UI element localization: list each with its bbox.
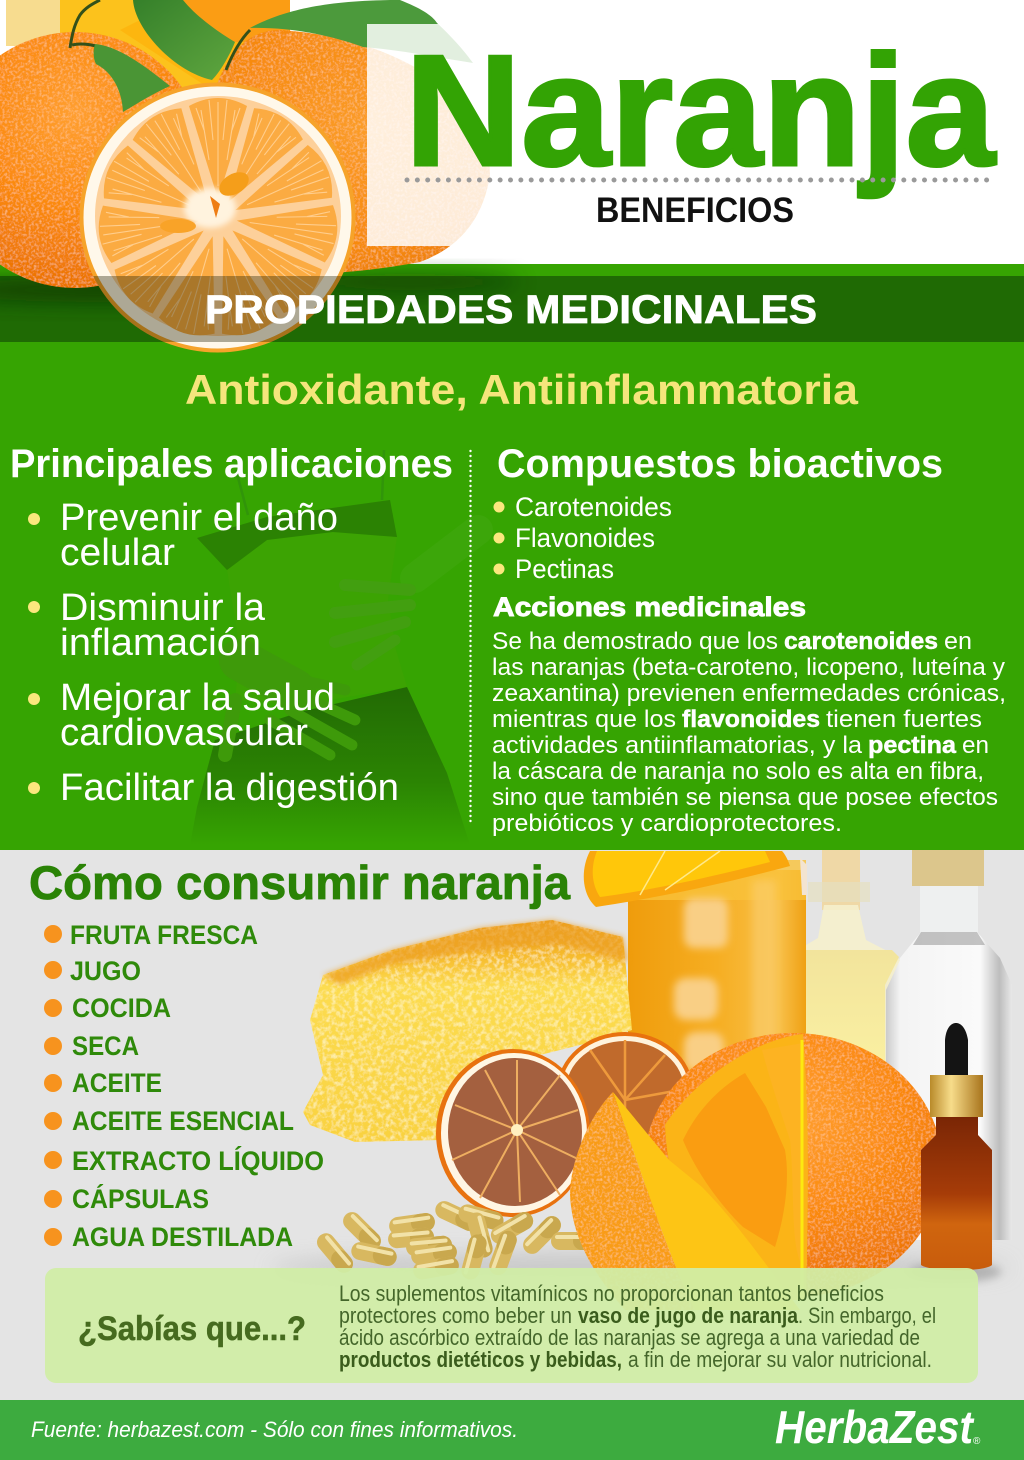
cake: [303, 920, 632, 1142]
logo: HerbaZest: ®: [973, 1436, 981, 1447]
orange slice on glass: [584, 851, 790, 907]
green properties panel background: [0, 264, 1024, 850]
compound list: Pectinas: [515, 554, 614, 584]
paragraph: acciones medicinales: Se ha demostrado que los: [492, 628, 778, 655]
half orange slice: [80, 82, 356, 352]
translucent title panel: [367, 24, 1024, 246]
item: jugo: JUGO: [70, 956, 141, 986]
dark band: Propiedades medicinales: [0, 276, 1024, 342]
item: aceite esencial: ACEITE ESENCIAL: [72, 1106, 294, 1136]
soft shadow under oranges: [0, 273, 520, 302]
leaf: top right: [250, 0, 473, 63]
item: Mejorar la salud cardiovascular: Mejorar la salud: [60, 677, 335, 719]
heading: Compuestos bioactivos: [497, 442, 943, 486]
hand left: [225, 660, 355, 755]
grey consumption panel background: [0, 850, 1024, 1400]
item: agua destilada: AGUA DESTILADA: [72, 1222, 293, 1252]
dotted column divider: [469, 451, 472, 822]
paragraph: acciones medicinales: las naranjas (beta-caroteno, licopeno, luteína y: [492, 654, 1005, 681]
compound list: Carotenoides: [515, 492, 672, 522]
item: Disminuir la inflamación: Disminuir la: [60, 587, 266, 629]
callout box: [45, 1268, 978, 1383]
large cut orange: [570, 1033, 942, 1310]
dried orange slice: front: [436, 1049, 590, 1217]
paragraph: acciones medicinales: en: [962, 732, 989, 759]
paragraph: acciones medicinales: actividades antiinflamatorias, y la: [492, 732, 863, 759]
clear bottle: [885, 850, 1012, 1240]
right orange: [200, 30, 490, 273]
item: seca: SECA: [72, 1031, 139, 1061]
item: cocida: COCIDA: [72, 993, 171, 1023]
product photo group: [270, 850, 1012, 1310]
logo: HerbaZest: HerbaZest: [775, 1401, 974, 1453]
leaf: centre: [133, 0, 235, 80]
paragraph: acciones medicinales: sino que también se piensa que posee efectos: [492, 784, 998, 811]
leaf: left: [94, 44, 170, 112]
compound list: Flavonoides: [515, 523, 655, 553]
subtitle: Beneficios: BENEFICIOS: [596, 191, 794, 230]
item: Prevenir el daño celular: [28, 497, 338, 574]
item: Prevenir el daño celular: celular: [60, 532, 175, 574]
bra: [197, 500, 397, 570]
callout body text: vaso de jugo de naranja: [578, 1303, 799, 1328]
heading: Principales aplicaciones: [10, 442, 453, 486]
item: Mejorar la salud cardiovascular: cardiovascular: [60, 712, 308, 754]
item: fruta fresca: FRUTA FRESCA: [70, 920, 258, 950]
paragraph: acciones medicinales: flavonoides: [682, 706, 820, 733]
callout body text: [339, 1281, 936, 1372]
paragraph: acciones medicinales: carotenoides: [784, 628, 938, 655]
right column: Compuestos bioactivos: [492, 442, 1006, 837]
paragraph: acciones medicinales: mientras que los: [492, 706, 676, 733]
heading: Propiedades medicinales: PROPIEDADES MEDICINALES: [205, 288, 817, 332]
paragraph: acciones medicinales: pectina: [868, 732, 957, 759]
back fruit pieces: [6, 0, 290, 92]
paragraph: acciones medicinales: tienen fuertes: [826, 706, 982, 733]
callout body text: protectores como beber un: [339, 1303, 572, 1328]
callout body text: Los suplementos vitamínicos no proporcionan tantos beneficios: [339, 1281, 884, 1306]
torso: [227, 532, 407, 705]
list: consumption forms: [44, 920, 324, 1252]
item: extracto líquido: EXTRACTO LÍQUIDO: [72, 1145, 324, 1176]
pants: [190, 687, 470, 845]
paragraph: acciones medicinales: en: [944, 628, 972, 655]
background silhouette: torso with hands: [190, 450, 478, 845]
item: Disminuir la inflamación: [28, 587, 266, 664]
subheading: Antioxidante, Antiinflammatoria: Antioxidante, Antiinflammatoria: [185, 366, 859, 413]
item: Facilitar la digestión: Facilitar la digestión: [60, 767, 399, 809]
footer bar: [0, 1400, 1024, 1460]
straps: [236, 450, 384, 515]
item: Disminuir la inflamación: inflamación: [60, 622, 261, 664]
title: Naranja: Naranja: [405, 23, 996, 199]
hero image: oranges with leaves: [0, 0, 520, 352]
soft floor shadows: [284, 1247, 994, 1268]
item: cápsulas: CÁPSULAS: [72, 1183, 209, 1214]
footer source text: Fuente: herbazest.com - Sólo con fines informativos.: [31, 1417, 518, 1442]
item: Prevenir el daño celular: Prevenir el daño: [60, 497, 338, 539]
paragraph: acciones medicinales: zeaxantina) previenen enfermedades crónicas,: [492, 680, 1006, 707]
callout heading: ¿Sabías que...?: [78, 1310, 306, 1348]
compound list: [494, 492, 672, 584]
dried orange slice: back: [557, 1032, 693, 1148]
dimmed slice under band: [93, 276, 342, 342]
dotted divider under title: [407, 178, 990, 182]
heading: Acciones medicinales: Acciones medicinales: [493, 592, 806, 622]
juice glass: [628, 858, 807, 1080]
callout body text: ácido ascórbico extraído de las naranjas se agrega a una variedad de: [339, 1325, 920, 1350]
paragraph: acciones medicinales: prebióticos y cardioprotectores.: [492, 810, 842, 837]
item: Mejorar la salud cardiovascular: [28, 677, 335, 754]
left column: Principales aplicaciones: [10, 442, 453, 809]
stems: [70, 0, 250, 70]
left orange: [0, 32, 205, 288]
callout body text: a fin de mejorar su valor nutricional.: [628, 1347, 932, 1372]
paragraph: acciones medicinales: [492, 628, 1006, 837]
front wedge: [613, 1092, 800, 1310]
heading: Cómo consumir naranja: Cómo consumir naranja: [29, 856, 571, 909]
paragraph: acciones medicinales: la cáscara de naranja no solo es alta en fibra,: [492, 758, 984, 785]
dropper bottle: [909, 1023, 1001, 1282]
item: seca: [44, 1031, 139, 1061]
item: aceite: ACEITE: [72, 1068, 162, 1098]
oil bottle: [806, 850, 900, 1080]
callout body text: productos dietéticos y bebidas,: [339, 1347, 622, 1372]
capsules: [317, 1201, 584, 1276]
callout body text: . Sin embargo, el: [798, 1303, 936, 1328]
hand right: [335, 530, 478, 665]
item: jugo: [44, 956, 141, 986]
callout: ¿Sabías que...?: [45, 1268, 978, 1383]
